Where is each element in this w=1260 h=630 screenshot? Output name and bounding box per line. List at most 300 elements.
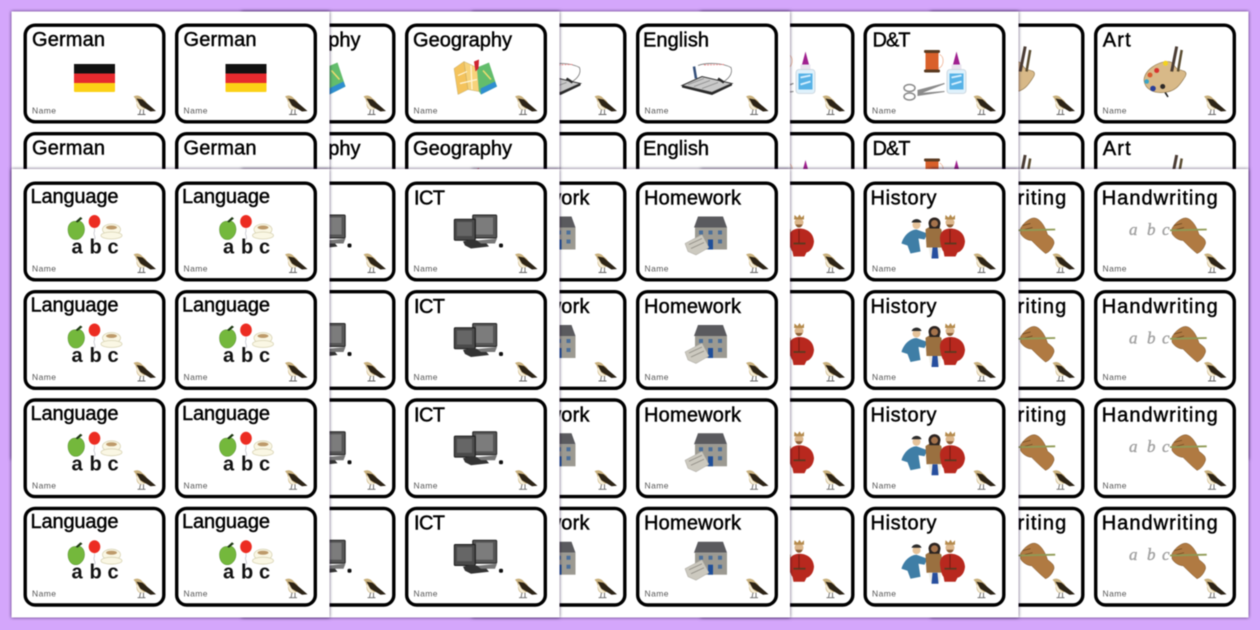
sheet paper [472,12,790,460]
icon: apple, balloon, cup [68,324,122,348]
title: History [720,513,786,535]
name label: Name [184,372,208,382]
title: Homework [644,296,742,318]
sheet: Art labels [930,12,1248,460]
sheet paper [12,12,330,460]
letters: abc [978,220,1018,239]
name label: Name [951,264,975,274]
sheet: Homework labels [472,169,790,618]
icon: computers [303,215,352,248]
icon: craft tools [904,50,966,100]
title: German [32,29,105,51]
title: ICT [414,296,445,318]
title: ICT [262,404,294,426]
title: History [870,404,936,426]
icon: map [302,168,346,203]
icon: German flag [226,64,266,92]
icon: bird [822,204,845,223]
icon: bird [285,362,308,381]
icon: bird [134,470,156,489]
icon: bird [285,253,308,272]
name label: Name [262,480,286,490]
name label: Name [951,480,975,490]
icon: writing hand [1170,218,1207,254]
card: Homework [638,508,776,605]
icon: bird [594,253,617,272]
card: Homework [486,183,625,280]
letters: abc [72,453,119,475]
letters: abc [223,562,270,584]
title: Handwriting [1102,188,1218,210]
icon: bird [746,253,768,272]
title: Art [1103,30,1131,52]
title: Handwriting [950,404,1066,426]
icon: craft tools [904,158,966,208]
title: Language [30,186,118,208]
letters: abc [72,562,119,584]
name label: Name [493,264,517,274]
icon: bird [822,253,845,272]
card: English [486,25,625,122]
name label: Name [1102,264,1127,274]
icon: map [302,60,346,94]
icon: bird [822,470,845,489]
card: Art [1096,25,1234,122]
name label: Name [721,106,745,116]
icon: computers [303,324,352,357]
card: History [865,400,1004,497]
card: Language [25,183,164,280]
icon: German flag [74,172,115,200]
icon: bird [1052,204,1075,223]
name label: Name [721,264,745,274]
title: Language [182,294,270,316]
title: ICT [262,296,294,318]
name label: Name [184,480,208,490]
card: Homework [638,183,776,280]
icon: bird [515,470,538,489]
card: D&T [714,25,853,122]
letters: abc [223,453,270,475]
card: History [714,400,853,497]
name label: Name [721,480,745,490]
card: Handwriting [944,292,1083,388]
card: German [25,134,164,230]
icon: apple, balloon, cup [68,432,122,456]
title: Language [182,403,270,425]
icon: computers [303,540,352,574]
card: History [714,183,853,280]
name label: Name [872,264,896,274]
icon: bird [1052,362,1075,381]
title: History [870,296,936,318]
title: Handwriting [950,296,1066,318]
icon: historical figures [750,431,814,475]
icon: bird [134,362,156,381]
icon: bird [134,204,156,223]
icon: computers [303,432,352,465]
name label: Name [262,589,286,599]
title: D&T [872,138,910,160]
icon: bird [1052,470,1075,489]
icon: bird [364,362,386,381]
icon: historical figures [750,540,814,584]
sheet: Geography labels [242,12,560,460]
card: Art [1096,134,1234,230]
letters: abc [1129,437,1170,456]
title: History [720,404,786,426]
icon: bird [822,362,845,381]
name label: Name [644,214,669,224]
icon: bird [285,579,308,598]
icon: computers [454,432,503,465]
icon: book and quill [530,172,580,204]
card: Language [177,508,315,605]
card: Homework [486,400,625,497]
card: Geography [407,134,545,230]
icon: apple, balloon, cup [220,540,274,565]
card: D&T [865,25,1004,122]
title: Homework [644,513,742,535]
icon: apple, balloon, cup [68,215,122,240]
letters: abc [978,545,1018,564]
name label: Name [721,372,745,382]
icon: book and quill [530,63,580,95]
name label: Name [721,589,745,599]
icon: bird [1052,579,1075,598]
card: History [714,292,853,388]
card: ICT [255,183,394,280]
title: English [492,30,558,52]
title: Language [30,403,118,425]
card: ICT [407,292,545,388]
name label: Name [493,106,517,116]
name label: Name [414,106,438,116]
icon: bird [974,470,996,489]
icon: bird [515,579,538,598]
title: D&T [722,30,760,52]
card: Language [177,400,315,497]
card: D&T [865,134,1004,230]
title: Homework [492,513,590,535]
title: English [643,138,709,160]
sheet: English labels [472,12,790,460]
letters: abc [1129,545,1170,564]
title: Language [182,511,270,533]
title: Homework [644,188,742,210]
card: Language [177,292,315,388]
card: Geography [255,134,394,230]
icon: bird [822,579,845,598]
title: Art [951,30,980,52]
name label: Name [414,372,438,382]
letters: abc [978,328,1018,348]
icon: bird [285,204,308,223]
name label: Name [262,372,286,382]
icon: bird [134,95,156,114]
name label: Name [414,480,438,490]
title: History [720,188,786,210]
icon: craft tools [753,158,815,208]
name label: Name [872,214,896,224]
card: Handwriting [944,400,1083,497]
sheet paper [700,169,1018,618]
card: Geography [255,25,394,122]
icon: bird [1052,95,1075,114]
name label: Name [872,106,896,116]
name label: Name [872,480,896,490]
icon: writing hand [1170,326,1207,362]
title: History [720,296,786,318]
icon: bird [515,362,538,381]
title: Language [182,186,270,208]
icon: bird [134,579,156,598]
icon: bird [364,579,386,598]
icon: bird [364,204,386,223]
title: Handwriting [1102,404,1218,426]
name label: Name [493,589,517,599]
icon: writing hand [1018,326,1055,362]
name label: Name [644,589,669,599]
sheet paper [242,169,560,618]
icon: bird [285,95,308,114]
name label: Name [951,214,975,224]
icon: palette [1144,46,1186,97]
title: ICT [262,513,294,535]
icon: historical figures [902,323,965,367]
card: English [486,134,625,230]
card: ICT [255,292,394,388]
icon: craft tools [753,50,815,100]
letters: abc [978,437,1018,456]
card: Handwriting [944,183,1083,280]
icon: bird [515,204,538,223]
icon: bird [746,579,768,598]
name label: Name [493,372,517,382]
card: Geography [407,25,545,122]
icon: bird [515,253,538,272]
card: German [177,25,315,122]
icon: house and paper [685,216,727,255]
card: Art [944,25,1083,122]
card: Language [25,400,164,497]
icon: palette [1144,155,1186,206]
icon: bird [974,579,996,598]
title: ICT [414,513,445,535]
name label: Name [951,106,975,116]
card: German [177,134,315,230]
icon: historical figures [750,323,814,367]
card: English [638,25,776,122]
name label: Name [414,214,438,224]
letters: abc [223,236,270,258]
card: Handwriting [944,508,1083,605]
icon: house and paper [685,433,727,472]
icon: German flag [74,64,115,92]
title: Handwriting [950,513,1066,535]
card: English [638,134,776,230]
title: D&T [872,30,910,52]
name label: Name [32,214,56,224]
card: Homework [638,292,776,388]
card: Language [25,292,164,388]
letters: abc [72,236,119,258]
icon: bird [594,95,617,114]
icon: bird [1204,362,1226,381]
icon: writing hand [1018,218,1055,254]
title: German [184,29,256,51]
name label: Name [493,214,517,224]
name label: Name [644,264,669,274]
sheet paper [472,169,790,618]
sheet paper [242,12,560,460]
icon: bird [134,253,156,272]
name label: Name [32,106,56,116]
name label: Name [1102,372,1127,382]
title: History [870,188,936,210]
sheet: History labels [700,169,1018,618]
name label: Name [184,106,208,116]
icon: house and paper [534,433,576,472]
card: Handwriting [1096,400,1234,497]
card: ICT [407,508,545,605]
icon: bird [364,253,386,272]
icon: writing hand [1170,435,1207,470]
letters: abc [1129,220,1170,239]
icon: house and paper [534,325,576,364]
name label: Name [1102,106,1127,116]
title: Language [30,511,118,533]
icon: bird [746,470,768,489]
title: German [184,138,256,160]
title: Homework [492,188,590,210]
card: ICT [407,183,545,280]
title: Geography [262,30,360,52]
name label: Name [721,214,745,224]
icon: map [454,60,497,94]
name label: Name [32,264,56,274]
icon: bird [1204,204,1226,223]
icon: bird [974,204,996,223]
sheet: Language labels [12,169,330,618]
name label: Name [184,214,208,224]
card: Handwriting [1096,183,1234,280]
name label: Name [1102,214,1127,224]
title: Language [30,294,118,316]
title: Homework [492,296,590,318]
icon: house and paper [534,216,576,255]
title: History [870,513,936,535]
title: D&T [722,138,760,160]
icon: book and quill [682,63,732,95]
name label: Name [32,372,56,382]
card: ICT [407,400,545,497]
icon: palette [992,46,1035,97]
card: History [865,508,1004,605]
title: English [643,30,709,52]
title: Geography [413,138,512,160]
title: Art [1103,138,1131,160]
sheet: ICT labels [242,169,560,618]
icon: historical figures [902,214,965,258]
name label: Name [644,106,669,116]
card: German [25,25,164,122]
title: Art [951,138,980,160]
icon: writing hand [1018,435,1055,470]
card: Handwriting [1096,508,1234,605]
icon: historical figures [902,540,965,584]
icon: map [454,168,497,203]
letters: abc [1129,328,1170,348]
icon: house and paper [534,542,576,580]
card: ICT [255,400,394,497]
card: Homework [486,292,625,388]
card: History [865,183,1004,280]
name label: Name [262,214,286,224]
title: Handwriting [1102,513,1218,535]
title: Homework [492,404,590,426]
name label: Name [872,372,896,382]
name label: Name [262,264,286,274]
icon: bird [746,362,768,381]
title: Homework [644,404,742,426]
card: ICT [255,508,394,605]
card: History [714,508,853,605]
icon: bird [285,470,308,489]
sheet: Handwriting labels [930,169,1248,618]
name label: Name [493,480,517,490]
icon: computers [454,215,503,248]
name label: Name [184,264,208,274]
name label: Name [262,106,286,116]
icon: bird [594,579,617,598]
icon: house and paper [685,542,727,580]
title: ICT [414,404,445,426]
title: Geography [413,30,512,52]
sheet paper [12,169,330,618]
card: D&T [714,134,853,230]
name label: Name [872,589,896,599]
name label: Name [414,589,438,599]
icon: palette [992,155,1035,206]
icon: apple, balloon, cup [220,432,274,456]
name label: Name [951,372,975,382]
icon: German flag [226,172,266,200]
icon: bird [1052,253,1075,272]
title: German [32,138,105,160]
name label: Name [951,589,975,599]
sheet: German labels [12,12,330,460]
name label: Name [414,264,438,274]
icon: writing hand [1018,543,1055,579]
sheet paper [700,12,1018,460]
icon: bird [1204,579,1226,598]
card: History [865,292,1004,388]
title: ICT [414,188,445,210]
card: Homework [486,508,625,605]
card: Language [177,183,315,280]
icon: bird [515,95,538,114]
name label: Name [1102,589,1127,599]
icon: bird [974,362,996,381]
icon: bird [746,95,768,114]
icon: writing hand [1170,543,1207,579]
icon: bird [746,204,768,223]
icon: bird [974,253,996,272]
card: Handwriting [1096,292,1234,388]
icon: house and paper [685,325,727,364]
sheet paper [930,12,1248,460]
